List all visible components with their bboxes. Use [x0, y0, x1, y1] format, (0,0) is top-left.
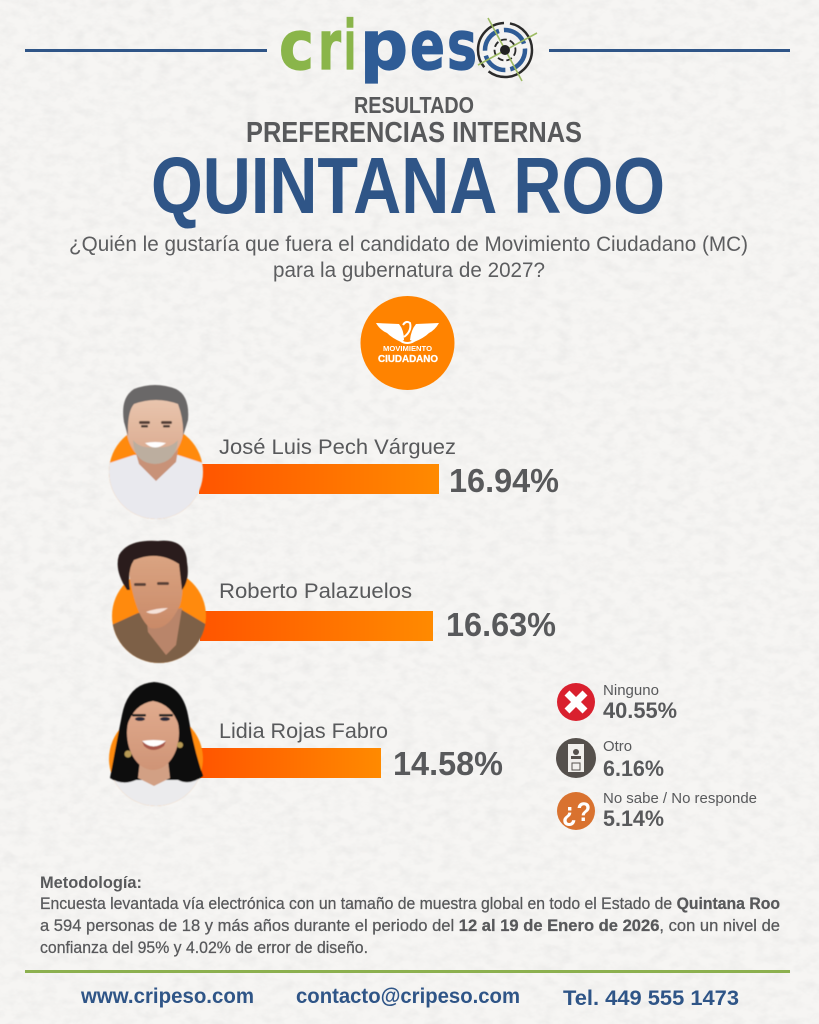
- footer contact: www.cripeso.com: [80, 985, 254, 1008]
- bar: 14.58%: [200, 748, 381, 778]
- portrait: Lidia Rojas: [108, 681, 204, 806]
- other option: Ninguno: 40.55%: [603, 698, 677, 723]
- other option: Ninguno: [557, 682, 677, 723]
- title: Quintana Roo: QUINTANA ROO: [151, 141, 665, 230]
- name: José Luis Pech Várguez: [219, 436, 456, 459]
- bar: 16.63%: [200, 611, 433, 641]
- heading: preferencias internas: PREFERENCIAS INTERNAS: [246, 117, 582, 149]
- bar: 16.94%: [199, 464, 439, 494]
- methodology: a 594 personas de 18 y más años durante el periodo del 12 al 19 de Enero de 2026, con un nivel de: [40, 917, 780, 935]
- portrait: José Luis Pech: [108, 384, 204, 520]
- logo: cripeso: s: [447, 7, 477, 86]
- candidate: José Luis Pech Várguez: [100, 385, 559, 525]
- footer contact: contacto@cripeso.com: [296, 985, 520, 1008]
- other option: No sabe / No responde: No sabe / No responde: [603, 790, 757, 807]
- heading: resultado: RESULTADO: [354, 92, 474, 118]
- party logo: Movimiento Ciudadano: MOVIMIENTO: [383, 344, 432, 353]
- logo: cripeso: [279, 7, 537, 86]
- candidate: Lidia Rojas Fabro: [105, 682, 503, 814]
- methodology: Encuesta levantada vía electrónica con un tamaño de muestra global en todo el Estado de Quintana Roo: [40, 895, 780, 913]
- icon: question marks: [557, 792, 595, 830]
- other option: No sabe / No responde: [557, 790, 757, 831]
- other option: No sabe / No responde: 5.14%: [603, 806, 664, 831]
- logo: cripeso: e: [410, 7, 445, 86]
- portrait: Roberto Palazuelos: [111, 540, 206, 664]
- icon: question marks: ¿?: [562, 797, 591, 827]
- other option: Otro: [556, 738, 664, 781]
- other option: Ninguno: Ninguno: [603, 682, 659, 699]
- icon: red X: [557, 683, 595, 721]
- logo: cripeso: c: [279, 7, 314, 86]
- icon: ballot: [556, 738, 596, 778]
- other option: Otro: 6.16%: [603, 756, 664, 781]
- methodology: [40, 874, 780, 957]
- methodology: confianza del 95% y 4.02% de error de diseño.: [40, 939, 368, 957]
- percentage: 14.58%: [393, 745, 503, 782]
- other option: Otro: Otro: [603, 738, 632, 755]
- logo: cripeso: i: [344, 7, 356, 86]
- percentage: 16.94%: [449, 462, 559, 499]
- logo: cripeso: p: [360, 7, 408, 86]
- footer contact: [80, 985, 739, 1010]
- survey question: [69, 233, 748, 282]
- party logo: Movimiento Ciudadano: CIUDADANO: [378, 353, 438, 365]
- methodology: Metodología:: [40, 874, 142, 892]
- name: Lidia Rojas Fabro: [219, 720, 388, 743]
- footer contact: Tel. 449 555 1473: [563, 987, 739, 1010]
- candidate: Roberto Palazuelos: [105, 541, 556, 670]
- survey question: ¿Quién le gustaría que fuera el candidato de Movimiento Ciudadano (MC): [69, 233, 748, 256]
- logo: cripeso: r: [318, 7, 341, 86]
- name: Roberto Palazuelos: [219, 580, 412, 603]
- party logo: Movimiento Ciudadano: [360, 296, 454, 390]
- percentage: 16.63%: [446, 606, 556, 643]
- survey question: para la gubernatura de 2027?: [273, 259, 545, 282]
